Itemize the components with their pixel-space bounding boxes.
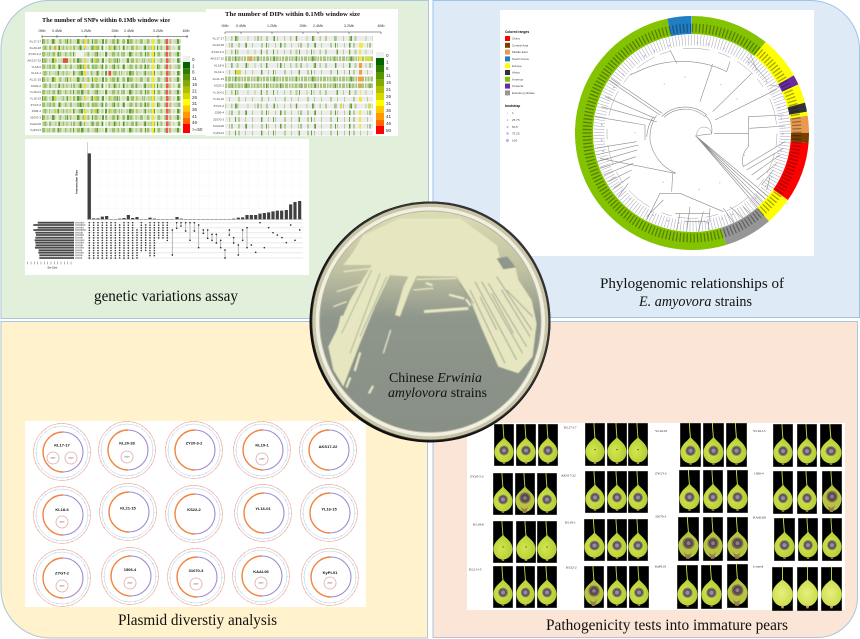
pears ZY20-3-2: ZY20-3-2: [470, 474, 484, 478]
plasmid map ZY20-3-2: [166, 422, 222, 478]
legend: coloured ranges: Erwinia pyrifoliae: [512, 91, 535, 95]
pear photos: [469, 423, 842, 611]
petri dish rim: [312, 204, 548, 440]
UpSet intersection bars: [89, 153, 300, 219]
DIP heatmap row labels: [210, 36, 224, 135]
DIP heatmap colour legend: 36: [386, 108, 392, 113]
pears KL20-28: [469, 424, 558, 466]
SNP heatmap row labels: AKS17-22: [27, 58, 41, 62]
SNP heatmap row labels: KS22-2: [31, 84, 41, 88]
plasmid map YL16-01: YL16-01: [255, 506, 271, 511]
SNP heatmap row labels: KyPL01: [30, 128, 41, 132]
plasmid map KL17-17: pEA29: [51, 456, 56, 460]
SNP heatmap axis: 2.4Mb: [124, 29, 134, 33]
DIP heatmap colour legend: 26: [386, 94, 392, 99]
tree bootstrap nodes: [601, 43, 783, 224]
pears KL20-28: KL20-28: [469, 426, 482, 430]
SNP heatmap colour legend: [183, 56, 203, 133]
pathogenicity caption: Pathogenicity tests into immature pears: [546, 617, 788, 634]
DIP heatmap axis: 0Mb: [222, 24, 228, 28]
plasmid map KL19-1: KL19-1: [255, 442, 269, 448]
DIP heatmap row labels: AKS17-22: [210, 57, 224, 61]
SNP heatmap colour legend: 26: [192, 95, 198, 100]
SNP heatmap colour legend: 6: [192, 70, 195, 74]
plasmid map ZYGT-2: pEA29: [60, 584, 65, 588]
pears YL16-15: [753, 424, 842, 467]
legend: coloured ranges: South Korea: [512, 57, 529, 61]
panel: pathogenicity tests: [433, 322, 858, 638]
legend: coloured ranges: Middle East: [512, 50, 528, 54]
DIP heatmap row labels: KS22-2: [214, 84, 224, 88]
legend: bootstrap: [505, 104, 520, 142]
plasmid map ZYGT-2: [34, 550, 90, 606]
phylogeny caption: Phylogenomic relationships of: [600, 276, 784, 292]
plasmid map KL21-15: [100, 484, 156, 540]
tree tip comb: [599, 40, 785, 226]
SNP heatmap title: The number of SNPs within 0.1Mb window size: [42, 17, 170, 24]
pears KS22-2: [566, 566, 649, 608]
pears Control: Control: [753, 564, 763, 568]
plasmid maps: [34, 422, 358, 606]
pears KL18-6: [473, 521, 557, 563]
pears KAAL06: [753, 516, 842, 561]
plasmid map KyPL01: pEA29: [328, 582, 333, 584]
DIP heatmap row labels: KAAL06: [213, 124, 224, 128]
SNP heatmap row labels: YL16-01: [30, 90, 41, 94]
legend: bootstrap: bootstrap: [505, 104, 520, 108]
DIP heatmap colour legend: 21: [386, 87, 392, 92]
DIP heatmap row labels: YL16-15: [213, 97, 224, 101]
genetic variations caption: genetic variations assay: [94, 288, 238, 305]
legend: bootstrap: 75.25: [512, 132, 520, 136]
petri dish caption: [388, 370, 487, 400]
pears YL16-15: YL16-15: [753, 429, 766, 433]
legend: bootstrap: 50.5: [512, 125, 518, 129]
SNP heatmap colour legend: 31: [192, 101, 198, 106]
legend: coloured ranges: [505, 30, 535, 95]
plasmid map KyPL01: [302, 549, 358, 605]
plasmid map KL20-28: [99, 422, 155, 478]
pears KL17-17: KL17-17: [564, 426, 577, 430]
pears KL19-1: [565, 519, 648, 561]
DIP heatmap cells: [225, 38, 373, 133]
DIP heatmap axis: [222, 24, 384, 34]
DIP heatmap colour legend: 46: [386, 121, 392, 126]
central petri dish: [310, 202, 550, 442]
SNP heatmap colour legend: 21: [192, 88, 198, 94]
legend: bootstrap: 1: [512, 111, 514, 115]
SNP heatmap row labels: [27, 40, 41, 132]
pears ZY20-3-2: [470, 473, 557, 515]
SNP heatmap colour legend: >=50: [192, 127, 203, 132]
plasmid map 31070-3: pEA29: [194, 582, 199, 586]
panel: genetic variations: [1, 0, 428, 318]
plasmid map KL20-28: KL20-28: [119, 440, 136, 446]
plasmid map KS22-2: [166, 486, 222, 542]
plasmid map KL21-15: KL21-15: [120, 506, 137, 510]
SNP heatmap axis: 0Mb: [38, 29, 46, 33]
DIP heatmap colour legend: 0: [386, 53, 389, 58]
SNP heatmap row labels: KL19-1: [31, 71, 41, 75]
panel: phylogenomic relationships: [433, 0, 860, 317]
pears ZYGT-2: [655, 470, 748, 513]
SNP heatmap row labels: KL17-17: [30, 40, 41, 44]
pears KyPL01: KyPL01: [655, 564, 667, 568]
UpSet intersection plot: Set Size: [47, 266, 58, 270]
legend: bootstrap: 25.75: [512, 118, 520, 122]
DIP heatmap colour legend: 1: [386, 60, 389, 64]
SNP heatmap row labels: YL18-6: [31, 65, 41, 69]
plasmid map 1506-4: [102, 548, 158, 604]
pears YL16-01: [655, 423, 747, 467]
DIP heatmap colour legend: 31: [386, 101, 392, 106]
petri dish caption: Chinese Erwinia: [389, 370, 482, 385]
SNP heatmap axis: 1.2Mb: [81, 29, 91, 33]
SNP heatmap colour legend: 41: [192, 114, 198, 119]
pears 31070-3: [655, 514, 748, 561]
legend: coloured ranges: Europe: [512, 64, 522, 68]
SNP heatmap row labels: KAAL06: [30, 122, 41, 126]
plasmid map KL18-6: pEA29: [60, 520, 65, 524]
plasmid map KL18-6: [34, 487, 90, 543]
plasmid map KL17-17: KL17-17: [54, 442, 71, 448]
SNP heatmap colour legend: 1: [192, 64, 195, 68]
plasmid map YL16-15: YL16-15: [321, 506, 337, 512]
plasmid map KL20-28: pEA29: [125, 456, 130, 458]
DIP heatmap row labels: KL19-1: [214, 70, 224, 74]
DIP heatmap row labels: KyPL01: [213, 131, 224, 135]
SNP heatmap row labels: KL20-28: [30, 46, 41, 50]
plasmid map 1506-4: pEA29: [128, 582, 133, 584]
DIP heatmap row labels: 1506-4: [215, 111, 224, 115]
DIP heatmap axis: 2Mb: [300, 24, 306, 28]
DIP heatmap colour legend: 11: [386, 73, 391, 78]
pears KL19-1: KL19-1: [565, 520, 576, 524]
pears AKS17-22: AKS17-22: [561, 474, 576, 478]
plasmid map KAAL06: pEA29: [259, 582, 264, 584]
plasmid map KL19-1: [234, 422, 290, 478]
pears YL16-01: YL16-01: [655, 429, 668, 433]
plasmid map KAAL06: KAAL06: [253, 569, 270, 574]
pears KL17-17: [564, 423, 648, 466]
plasmid map KL18-6: KL18-6: [55, 507, 69, 512]
SNP heatmap row labels: ZY20-3-2: [28, 52, 41, 56]
SNP heatmap colour legend: 11: [192, 76, 197, 81]
DIP heatmap axis: 1.2Mb: [267, 24, 277, 28]
DIP heatmap colour legend: 41: [386, 114, 392, 119]
DIP heatmap: [206, 9, 398, 136]
pears ZYGT-2: ZYGT-2: [655, 472, 667, 476]
UpSet matrix row bands: [87, 223, 303, 258]
pears AKS17-22: [561, 471, 648, 513]
plasmid map 31070-3: [168, 549, 224, 605]
UpSet intersection plot: Intersection Size: [74, 170, 78, 194]
plasmid map KAAL06: [233, 548, 289, 604]
DIP heatmap axis: 0.4Mb: [236, 24, 246, 28]
SNP heatmap axis: 3.2Mb: [153, 29, 163, 33]
SNP heatmap axis: [38, 29, 190, 38]
DIP heatmap colour legend: 16: [386, 80, 392, 85]
SNP heatmap row labels: KL21-15: [30, 78, 41, 82]
tree tip arcs: [607, 48, 777, 218]
plasmid map ZY20-3-2: ZY20-3-2: [186, 440, 203, 446]
pears KL21-15: [469, 566, 557, 608]
DIP heatmap row labels: KL21-15: [213, 77, 224, 81]
DIP heatmap row labels: 31070-3: [213, 118, 224, 122]
bacterial lawn: [328, 218, 537, 393]
DIP heatmap row labels: YL16-01: [213, 90, 224, 94]
plasmid map KL17-17: [34, 424, 90, 480]
plasmid map KS22-2: KS22-2: [187, 507, 202, 512]
DIP heatmap colour legend: 6: [386, 66, 389, 71]
DIP heatmap row labels: KL17-17: [213, 36, 224, 40]
legend: coloured ranges: Central Asia: [512, 43, 529, 47]
pears KS22-2: KS22-2: [566, 566, 577, 570]
plasmid caption: Plasmid diverstiy analysis: [118, 612, 277, 629]
phylogeny caption: [600, 276, 784, 310]
plasmid map AKS17-22: [300, 422, 356, 478]
phylogeny caption: E. amyovora strains: [638, 294, 752, 310]
SNP heatmap axis: 4Mb: [182, 29, 190, 33]
DIP heatmap axis: 2.4Mb: [313, 24, 323, 28]
legend: coloured ranges: China: [512, 37, 520, 41]
DIP heatmap row labels: KL20-28: [213, 43, 224, 47]
plasmid map YL16-01: [235, 485, 291, 541]
pears KAAL06: KAAL06: [753, 516, 766, 520]
DIP heatmap axis: 4Mb: [378, 24, 384, 28]
SNP heatmap cells: [42, 39, 181, 133]
pears Control: [753, 564, 842, 611]
UpSet set labels: [75, 223, 86, 258]
plasmid map KL17-17: pEA29: [69, 456, 74, 460]
DIP heatmap axis: 3.2Mb: [344, 24, 354, 28]
SNP heatmap row labels: YL16-15: [30, 96, 41, 100]
plasmid map KyPL01: KyPL01: [323, 570, 338, 575]
pears 1506-4: [754, 471, 842, 514]
pears 1506-4: 1506-4: [754, 472, 764, 476]
tree branches: [595, 50, 785, 232]
SNP heatmap row labels: 1506-4: [32, 109, 41, 113]
panel: plasmid diversity: [1, 322, 428, 638]
UpSet set size bars: [33, 223, 74, 258]
SNP heatmap axis: 0.4Mb: [52, 29, 62, 33]
SNP heatmap axis: 2Mb: [112, 29, 118, 33]
DIP heatmap row labels: ZYGT-2: [213, 104, 224, 108]
plasmid map 1506-4: 1506-4: [124, 567, 137, 572]
plasmid map KL19-1: pEA29: [260, 458, 265, 460]
coloured range ring: [584, 25, 800, 241]
DIP heatmap colour legend: [376, 52, 392, 134]
UpSet set size axis: [27, 259, 74, 267]
DIP heatmap colour legend: 50: [386, 128, 392, 133]
legend: bootstrap: 100: [512, 138, 517, 142]
legend: coloured ranges: Oceania: [512, 84, 524, 88]
SNP heatmap colour legend: 46: [192, 120, 198, 125]
UpSet matrix dots: [89, 223, 300, 259]
SNP heatmap row labels: 31070-3: [30, 116, 41, 120]
pears KyPL01: [655, 564, 748, 609]
SNP heatmap row labels: ZYGT-2: [30, 103, 41, 107]
UpSet intersection plot: [25, 139, 309, 275]
SNP heatmap colour legend: 16: [192, 82, 198, 87]
petri dish caption: amylovora strains: [388, 385, 487, 400]
DIP heatmap row labels: KL18-6: [214, 64, 224, 68]
plasmid map ZYGT-2: ZYGT-2: [55, 570, 70, 576]
DIP heatmap row labels: ZY20-3-2: [211, 50, 224, 54]
SNP heatmap colour legend: 0: [192, 57, 195, 62]
plasmid map 31070-3: 31070-3: [189, 568, 204, 573]
pears KL18-6: KL18-6: [473, 522, 484, 526]
phylogenetic tree: [584, 25, 800, 241]
pears KL21-15: KL21-15: [469, 568, 482, 572]
legend: coloured ranges: America: [512, 77, 523, 81]
legend: coloured ranges: Africa: [512, 71, 520, 75]
SNP heatmap colour legend: 36: [192, 107, 198, 112]
plasmid map AKS17-22: AKS17-22: [319, 444, 338, 449]
legend: coloured ranges: Colored ranges: [505, 30, 529, 34]
SNP heatmap: [25, 12, 206, 135]
pears 31070-3: 31070-3: [655, 514, 667, 518]
plasmid map YL16-15: [301, 485, 357, 541]
DIP heatmap title: The number of DIPs within 0.1Mb window size: [225, 11, 360, 18]
